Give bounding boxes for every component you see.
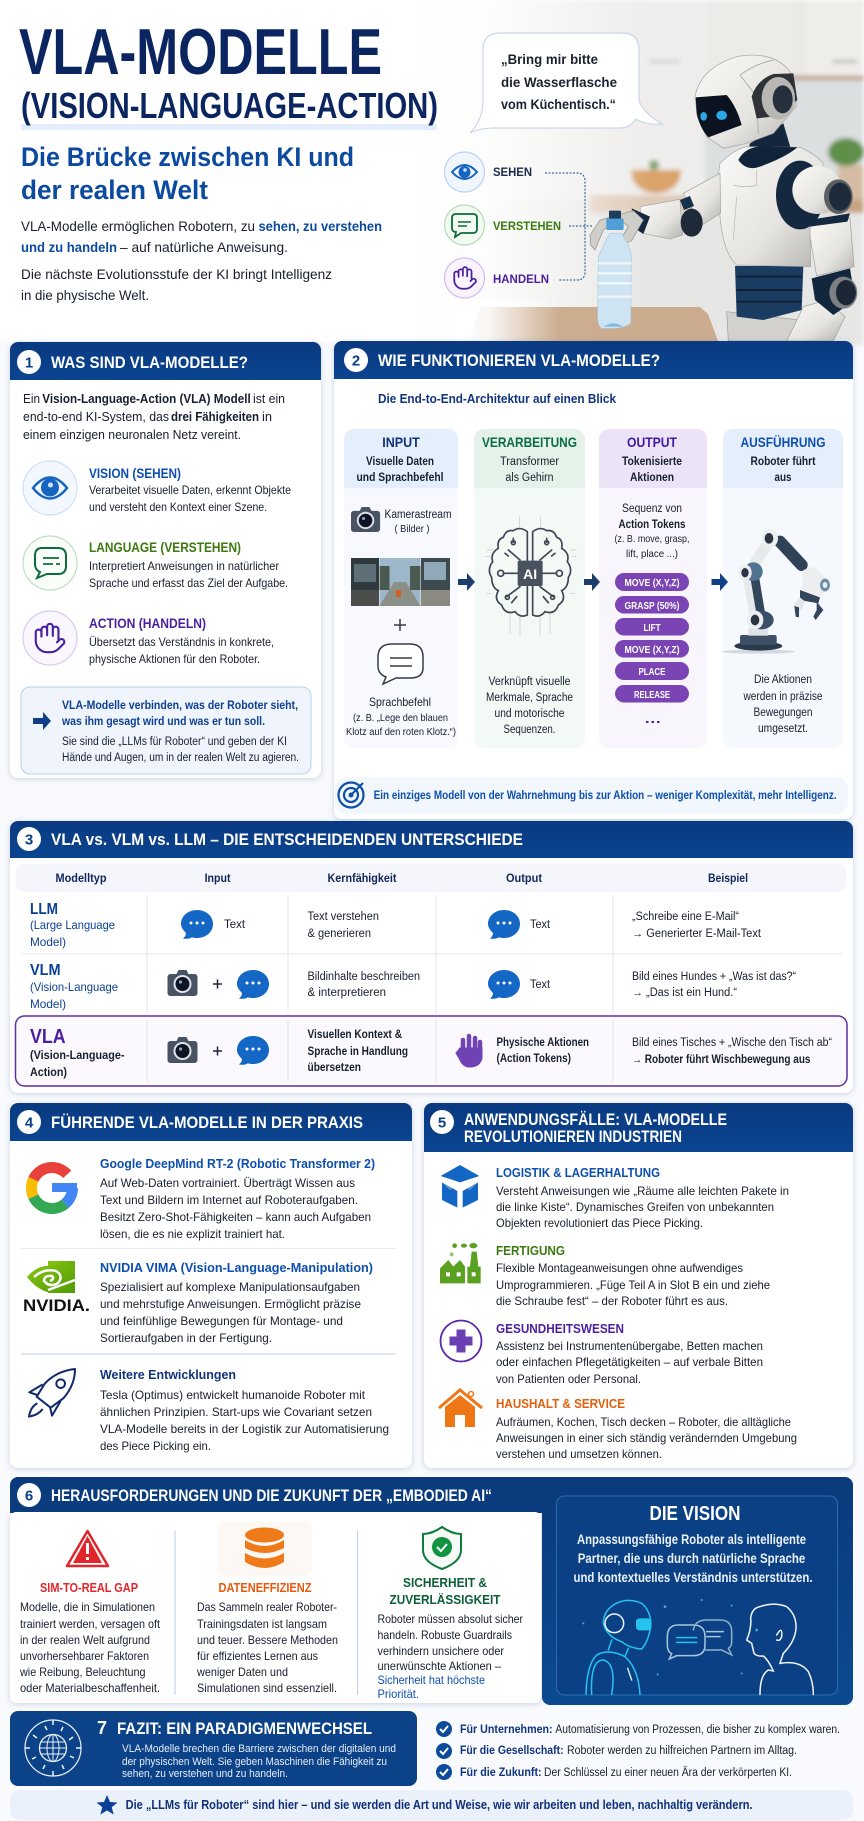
panel 4: fuehrende modelle [10, 1103, 412, 1468]
column: input: Sprachbefehl [369, 695, 431, 709]
column: input: und Sprachbefehl [356, 472, 444, 484]
row: VLM: Bildinhalte beschreiben [308, 971, 420, 983]
column: verarbeitung: Transformer [500, 456, 559, 468]
icon: handeln: HANDELN [493, 272, 549, 286]
row: VLM: Model) [30, 997, 66, 1011]
row: VLA highlighted: Sprache in Handlung [308, 1046, 408, 1058]
title: (VISION-LANGUAGE-ACTION) [21, 85, 438, 126]
vision box: und kontextuelles Verständnis unterstützen. [574, 1570, 812, 1585]
row: LLM: Model) [30, 935, 66, 949]
panel 6: herausforderungen [10, 1477, 853, 1705]
logistik text: Objekten revolutioniert das Piece Picking. [496, 1216, 703, 1230]
weitere text: Weitere Entwicklungen [100, 1367, 236, 1382]
table header: Input [205, 871, 231, 885]
icon: verstehen [444, 205, 561, 245]
challenge: sim-to-real: in der realen Welt aufgrund [20, 1633, 150, 1647]
challenge: dateneffizienz: und teuer. Bessere Methoden [197, 1633, 338, 1647]
nvidia text: und feinfühlige Bewegungen für Montage- und [100, 1314, 343, 1328]
action token pills: RELEASE [634, 690, 670, 701]
speech bubble [470, 33, 662, 133]
panel 7: fazit [10, 1711, 417, 1786]
row: VLA highlighted: → Roboter führt Wischbewegung aus [632, 1054, 810, 1066]
panel 5: anwendungsfaelle: ANWENDUNGSFÄLLE: VLA-MODELLE [464, 1111, 727, 1129]
row: VLM: (Vision-Language [30, 980, 118, 994]
challenge: sim-to-real: trainiert werden, versagen oft [20, 1617, 161, 1631]
icon: factory [440, 1243, 481, 1283]
arrow: output to ausfuehrung [712, 573, 728, 591]
language item: Interpretiert Anweisungen in natürlicher [89, 559, 279, 573]
arrow: input to verarbeitung [458, 573, 475, 591]
summary strip [335, 777, 848, 814]
column: ausfuehrung: AUSFÜHRUNG [740, 434, 826, 450]
logistik text: Versteht Anweisungen wie „Räume alle leichten Pakete in [496, 1184, 789, 1198]
takeaways list: Automatisierung von Prozessen, die bisher zu komplex waren. [555, 1724, 840, 1736]
callout: VLA-Modelle verbinden, was der Roboter sieht, [62, 698, 298, 712]
icon: nvidia logo [23, 1261, 90, 1315]
row: VLM: Text [530, 979, 551, 991]
table header: Beispiel [708, 871, 748, 885]
challenge: dateneffizienz: weniger Daten und [196, 1665, 288, 1679]
column: input: INPUT [382, 434, 420, 450]
panel 3: vergleich: VLA vs. VLM vs. LLM – DIE ENTSCHEIDENDEN UNTERSCHIEDE [51, 831, 523, 849]
nvidia text: Spezialisiert auf komplexe Manipulationsaufgaben [100, 1280, 360, 1294]
row: VLM [30, 962, 796, 1011]
weitere text: VLA-Modelle bereits in der Logistik zur Automatisierung [100, 1422, 389, 1436]
row: VLA highlighted: Bild eines Tisches + „Wische den Tisch ab“ [632, 1037, 832, 1049]
bottom banner [10, 1790, 853, 1820]
row: LLM: (Large Language [30, 918, 115, 932]
challenge: sicherheit [378, 1527, 523, 1701]
row: VLM: Bild eines Hundes + „Was ist das?“ [632, 971, 796, 983]
panel 2: wie funktionieren VLA-Modelle: WIE FUNKTIONIEREN VLA-MODELLE? [378, 352, 660, 370]
row: VLA highlighted: (Action Tokens) [496, 1053, 571, 1065]
panel 7: fazit: der physischen Welt. Sie geben Maschinen die Fähigkeit zu [122, 1756, 387, 1768]
icon: AI brain [485, 517, 577, 635]
gesundheit text: GESUNDHEITSWESEN [496, 1321, 624, 1336]
icon: verstehen: VERSTEHEN [493, 219, 561, 233]
fertigung text: Umprogrammieren. „Füge Teil A in Slot B ein und ziehe [496, 1278, 770, 1292]
column: ausfuehrung: Die Aktionen [754, 674, 812, 686]
gesundheit text: Assistenz bei Instrumentenübergabe, Betten machen [496, 1339, 763, 1353]
google text: Besitzt Zero-Shot-Fähigkeiten – kann auch Aufgaben [100, 1210, 371, 1224]
column: verarbeitung: VERARBEITUNG [482, 434, 577, 450]
action item: Übersetzt das Verständnis in konkrete, [89, 635, 274, 649]
table header: Kernfähigkeit [328, 871, 396, 885]
row: LLM [30, 901, 762, 949]
challenge: dateneffizienz: Trainingsdaten ist langsam [197, 1617, 327, 1631]
takeaways list: Roboter werden zu hilfreichen Partnern im Alltag. [567, 1745, 797, 1757]
column: output: Action Tokens [618, 519, 686, 531]
column: verarbeitung: als Gehirn [506, 472, 554, 484]
weitere text: ähnlichen Prinzipien. Start-ups wie Covariant setzen [100, 1405, 372, 1419]
row: VLA highlighted: Visuellen Kontext & [308, 1029, 402, 1041]
weitere text [100, 1367, 389, 1453]
definition text: einem einzigen neuronalen Netz vereint. [23, 427, 241, 442]
google text: Auf Web-Daten vortrainiert. Überträgt Wissen aus [100, 1176, 355, 1190]
icon: camera [351, 507, 380, 532]
gesundheit text [496, 1321, 763, 1386]
row: VLA highlighted: (Vision-Language- [30, 1050, 125, 1062]
intro text: Die nächste Evolutionsstufe der KI bringt Intelligenz [21, 266, 332, 282]
takeaways list [436, 1721, 840, 1780]
row: LLM: & generieren [308, 928, 371, 940]
challenge: dateneffizienz: Das Sammeln realer Roboter- [197, 1600, 337, 1614]
action item: physische Aktionen für den Roboter. [89, 652, 260, 666]
action token pills [615, 573, 689, 702]
definition text: Vision-Language-Action (VLA) Modell [42, 391, 251, 406]
panel 4: fuehrende modelle: FÜHRENDE VLA-MODELLE IN DER PRAXIS [51, 1113, 363, 1132]
panel 5: anwendungsfaelle: REVOLUTIONIEREN INDUSTRIEN [464, 1128, 682, 1146]
gesundheit text: von Patienten oder Personal. [496, 1372, 641, 1386]
intro text: und zu handeln [21, 239, 117, 255]
callout: Sie sind die „LLMs für Roboter“ und geben der KI [62, 736, 287, 748]
challenge: dateneffizienz: für effizientes Lernen aus [197, 1649, 318, 1663]
arrow: verarbeitung to output [584, 573, 600, 591]
google text: Google DeepMind RT-2 (Robotic Transformer 2) [100, 1156, 375, 1171]
logistik text [496, 1165, 789, 1230]
vision item: VISION (SEHEN) [89, 466, 181, 481]
icon: nvidia logo: NVIDIA. [23, 1296, 90, 1315]
challenge: sim-to-real: wie Reibung, Beleuchtung [19, 1665, 146, 1679]
weitere text: des Piece Picking ein. [100, 1439, 211, 1453]
title: VLA-MODELLE [19, 15, 382, 88]
challenge: sicherheit: unerwünschte Aktionen – [378, 1659, 501, 1673]
column: input [344, 429, 458, 748]
speech bubble: „Bring mir bitte [501, 51, 598, 67]
row: LLM: LLM [30, 901, 58, 918]
takeaways list: Für Unternehmen: [460, 1724, 553, 1736]
icon: house [439, 1390, 482, 1427]
panel 5: anwendungsfaelle: 5 [438, 1114, 446, 1132]
panel 7: fazit: sehen, zu verstehen und zu handeln. [122, 1768, 288, 1780]
icon: handeln [444, 258, 549, 298]
subtitle: Die Brücke zwischen KI und [21, 142, 354, 172]
panel 1: was sind VLA-Modelle [10, 342, 321, 778]
hero photo: robot in kitchen [400, 0, 864, 345]
callout: Hände und Augen, um in der realen Welt zu agieren. [62, 752, 299, 764]
bottom banner: Die „LLMs für Roboter“ sind hier – und sie werden die Art und Weise, wie wir arbeiten und leben, nachhaltig verändern. [126, 1797, 753, 1812]
column: ausfuehrung: aus [774, 472, 792, 484]
panel 7: fazit: 7 [97, 1718, 107, 1738]
table header: Output [506, 871, 542, 885]
google text [100, 1156, 375, 1241]
challenge: sim-to-real: SIM-TO-REAL GAP [40, 1580, 138, 1595]
vision box: Partner, die uns durch natürliche Sprache [578, 1551, 806, 1566]
column: verarbeitung: und motorische [494, 708, 564, 720]
column: ausfuehrung [722, 429, 843, 748]
subtitle: der realen Welt [21, 175, 208, 205]
dotted connector [545, 173, 592, 280]
intro text [21, 218, 382, 303]
challenge: sicherheit: Sicherheit hat höchste [378, 1673, 485, 1687]
panel 2: wie funktionieren VLA-Modelle [334, 341, 853, 819]
column: output: Aktionen [630, 472, 674, 484]
definition text: drei Fähigkeiten [171, 409, 259, 424]
challenge: dateneffizienz [196, 1522, 338, 1695]
column: output: lift, place ...) [626, 548, 678, 560]
column: verarbeitung: Verknüpft visuelle [488, 676, 570, 688]
row: LLM: → Generierter E-Mail-Text [632, 928, 762, 940]
google text: lösen, die es nie explizit trainiert hat. [100, 1227, 285, 1241]
takeaways list: Der Schlüssel zu einer neuen Ära der verkörperten KI. [544, 1767, 792, 1779]
action item: ACTION (HANDELN) [89, 616, 206, 631]
column: verarbeitung: Merkmale, Sprache [486, 692, 573, 704]
vision item [23, 461, 291, 515]
definition text: end-to-end KI-System, das [23, 409, 169, 424]
definition text: ist ein [253, 391, 285, 406]
row: VLM: → „Das ist ein Hund.“ [632, 987, 737, 999]
speech bubble: die Wasserflasche [501, 74, 617, 90]
vision box: Anpassungsfähige Roboter als intelligente [577, 1532, 806, 1547]
intro text: – auf natürliche Anweisung. [120, 239, 288, 255]
action token pills: LIFT [644, 623, 660, 634]
logistik text: die linke Kiste“. Dynamisches Greifen von unbekannten [496, 1200, 774, 1214]
icon: box [441, 1165, 479, 1208]
intro text: in die physische Welt. [21, 287, 149, 303]
challenge: sim-to-real: Modelle, die in Simulationen [20, 1600, 155, 1614]
action token pills: MOVE (X,Y,Z) [624, 645, 680, 656]
row: LLM: Text [530, 919, 551, 931]
icon: globe [25, 1720, 81, 1776]
panel 7: fazit: VLA-Modelle brechen die Barriere zwischen der digitalen und [122, 1743, 396, 1755]
column: output: (z. B. move, grasp, [614, 533, 690, 545]
fertigung text: Flexible Montageanweisungen ohne aufwendiges [496, 1261, 743, 1275]
fertigung text: FERTIGUNG [496, 1243, 565, 1258]
vision box: DIE VISION [650, 1503, 740, 1525]
haushalt text: HAUSHALT & SERVICE [496, 1396, 625, 1411]
column: input: (z. B. „Lege den blauen [353, 713, 448, 724]
column: ausfuehrung: Roboter führt [750, 456, 816, 468]
language item [23, 536, 288, 590]
icon: sehen [444, 152, 532, 192]
panel 3: vergleich [10, 821, 853, 1093]
takeaways list: Für die Zukunft: [460, 1767, 542, 1779]
row: LLM: „Schreibe eine E-Mail“ [632, 911, 739, 923]
title [19, 15, 438, 130]
row: VLA highlighted: Physische Aktionen [496, 1037, 589, 1049]
challenge: sicherheit: SICHERHEIT & [403, 1575, 487, 1590]
haushalt text: verstehen und umsetzen können. [496, 1447, 662, 1461]
row: VLM: VLM [30, 962, 61, 979]
definition text: Ein [23, 391, 40, 406]
vision item: Verarbeitet visuelle Daten, erkennt Objekte [89, 483, 291, 497]
camera image strip [351, 558, 450, 606]
row: VLA highlighted: Action) [30, 1067, 67, 1079]
challenge: sicherheit: Priorität. [378, 1687, 419, 1701]
fertigung text: die Schraube fest“ – der Roboter führt es aus. [496, 1294, 728, 1308]
panel 1: was sind VLA-Modelle: 1 [25, 354, 33, 372]
speech bubble: vom Küchentisch.“ [501, 96, 616, 112]
challenge: dateneffizienz: DATENEFFIZIENZ [218, 1580, 312, 1595]
icon: AI brain: AI [523, 566, 537, 582]
language item: LANGUAGE (VERSTEHEN) [89, 540, 241, 555]
column: output [599, 429, 707, 748]
nvidia text: Sortieraufgaben in der Fertigung. [100, 1331, 272, 1345]
challenge: sicherheit: Roboter müssen absolut sicher [378, 1612, 523, 1626]
column: input: Klotz auf den roten Klotz.“) [346, 727, 456, 738]
action token pills: PLACE [638, 667, 666, 678]
row: VLM: & interpretieren [308, 987, 386, 999]
panel 3: vergleich: 3 [25, 832, 33, 848]
haushalt text: Aufräumen, Kochen, Tisch decken – Roboter, die alltägliche [496, 1415, 791, 1429]
vision illustration: robot and human [582, 1599, 813, 1694]
takeaways list: Für die Gesellschaft: [460, 1745, 564, 1757]
definition text: in [262, 409, 272, 424]
callout [21, 687, 311, 774]
row: LLM: Text verstehen [308, 911, 379, 923]
row: VLA highlighted: übersetzen [308, 1062, 361, 1074]
row: VLA highlighted: VLA [30, 1026, 66, 1048]
action item [23, 611, 274, 666]
column: ausfuehrung: werden in präzise [743, 691, 822, 703]
challenge: sicherheit: verhindern unsichere oder [378, 1644, 504, 1658]
panel 7: fazit: FAZIT: EIN PARADIGMENWECHSEL [117, 1719, 372, 1738]
nvidia text: und mehrstufige Anweisungen. Ermöglicht präzise [100, 1297, 361, 1311]
definition text [23, 391, 285, 442]
nvidia text: NVIDIA VIMA (Vision-Language-Manipulation) [100, 1260, 373, 1275]
panel 1: was sind VLA-Modelle: WAS SIND VLA-MODELLE? [51, 354, 248, 372]
challenge: sim-to-real [19, 1531, 161, 1695]
icon: rocket [29, 1369, 75, 1417]
challenge: sicherheit: ZUVERLÄSSIGKEIT [390, 1592, 501, 1607]
row: VLA highlighted [16, 1016, 847, 1086]
icon: robot arm [722, 529, 830, 654]
language item: Sprache und erfasst das Ziel der Aufgabe. [89, 576, 288, 590]
subtitle [21, 142, 354, 205]
google text: Text und Bildern im Internet auf Roboteraufgaben. [100, 1193, 358, 1207]
haushalt text [496, 1396, 797, 1461]
challenge: sim-to-real: unvorhersehbarer Faktoren [20, 1649, 149, 1663]
weitere text: Tesla (Optimus) entwickelt humanoide Roboter mit [100, 1388, 366, 1402]
icon: medical cross [440, 1320, 482, 1362]
panel 2: wie funktionieren VLA-Modelle: 2 [352, 352, 360, 370]
architecture subheading: Die End-to-End-Architektur auf einen Blick [378, 391, 617, 406]
column: output: Sequenz von [622, 503, 682, 515]
intro text: VLA-Modelle ermöglichen Robotern, zu [21, 218, 255, 234]
vision item: und versteht den Kontext einer Szene. [89, 500, 267, 514]
challenge: sicherheit: handeln. Robuste Guardrails [378, 1628, 512, 1642]
action token pills: GRASP (50%) [624, 601, 680, 612]
panel 6: herausforderungen: 6 [25, 1488, 33, 1504]
table header: Modelltyp [56, 871, 106, 885]
logistik text: LOGISTIK & LAGERHALTUNG [496, 1165, 660, 1180]
fertigung text [496, 1243, 770, 1308]
challenge: dateneffizienz: Simulationen sind essenziell. [197, 1681, 337, 1695]
icon: solid hand [456, 1036, 482, 1067]
callout: was ihm gesagt wird und was er tun soll. [61, 714, 265, 728]
table header [16, 864, 846, 892]
column: input: Visuelle Daten [366, 456, 434, 468]
column: verarbeitung: Sequenzen. [504, 724, 556, 736]
column: output: OUTPUT [627, 434, 677, 450]
column: verarbeitung [474, 429, 585, 748]
gesundheit text: oder einfachen Pflegetätigkeiten – auf verbale Bitten [496, 1355, 763, 1369]
haushalt text: Anweisungen in einer sich ständig verändernden Umgebung [496, 1431, 797, 1445]
icon: speech bubble outline [378, 644, 423, 684]
icon: sehen: SEHEN [493, 165, 532, 179]
panel 6: herausforderungen: HERAUSFORDERUNGEN UND DIE ZUKUNFT DER „EMBODIED AI“ [51, 1487, 492, 1505]
panel 4: fuehrende modelle: 4 [25, 1114, 34, 1132]
panel 5: anwendungsfaelle [424, 1103, 853, 1468]
challenge: sim-to-real: oder Materialbeschaffenheit. [20, 1681, 160, 1695]
vision box [556, 1496, 838, 1695]
row: LLM: Text [224, 919, 246, 931]
nvidia text [100, 1260, 373, 1345]
icon: google logo [31, 1168, 77, 1209]
column: ausfuehrung: umgesetzt. [758, 723, 808, 735]
intro text: sehen, zu verstehen [258, 218, 382, 234]
column: output: Tokenisierte [622, 456, 682, 468]
column: input: Kamerastream [384, 509, 452, 521]
column: input: ( Bilder ) [394, 523, 430, 535]
column: ausfuehrung: Bewegungen [754, 707, 812, 719]
action token pills: MOVE (X,Y,Z) [624, 578, 680, 589]
